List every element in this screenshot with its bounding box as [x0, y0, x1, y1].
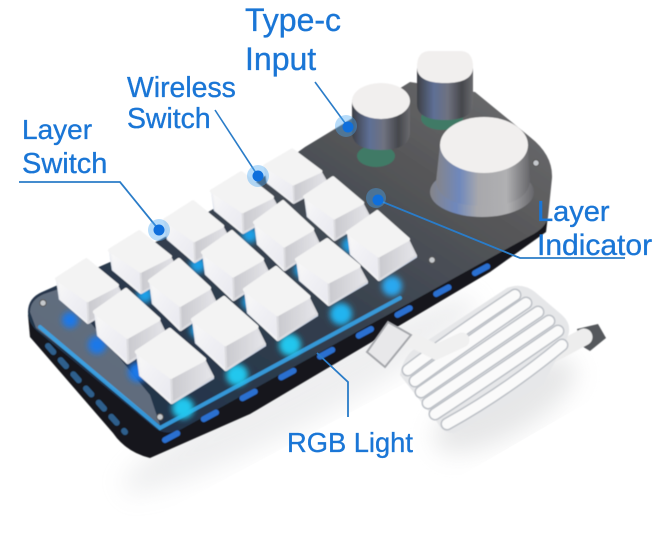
callout: Type-c Input: Input — [245, 41, 316, 77]
keypad — [28, 51, 552, 458]
callout: Wireless Switch: Switch — [127, 103, 211, 135]
callout: Wireless Switch: Wireless — [127, 72, 236, 104]
cable left connector — [367, 322, 462, 367]
callout: Wireless Switch — [127, 72, 269, 187]
callout: Type-c Input: Type-c — [245, 2, 341, 38]
callout: RGB Light: RGB Light — [287, 427, 413, 458]
background shadow — [109, 275, 589, 515]
usb cable — [367, 286, 606, 433]
blue edge light — [40, 265, 490, 440]
callout: Layer Switch: Layer — [22, 114, 92, 145]
callout: Layer Indicator — [366, 188, 652, 262]
acrylic left edge highlight — [30, 288, 160, 425]
knob: left — [352, 83, 410, 167]
cable coil — [400, 286, 569, 433]
callout: Layer Indicator: Indicator — [537, 229, 652, 262]
cable right connector — [545, 324, 606, 358]
callout: Layer Switch — [19, 114, 170, 241]
key glow lights — [62, 227, 402, 419]
callout: RGB Light — [287, 353, 413, 458]
knob: large — [430, 117, 534, 217]
callout: Layer Switch: Switch — [22, 148, 107, 180]
knob: back — [417, 51, 473, 130]
screws — [40, 160, 539, 420]
keypad base — [28, 170, 548, 458]
key grid — [57, 150, 416, 403]
acrylic top plate — [28, 82, 552, 433]
callout: Type-c Input — [245, 2, 357, 137]
callout: Layer Indicator: Layer — [537, 196, 610, 228]
